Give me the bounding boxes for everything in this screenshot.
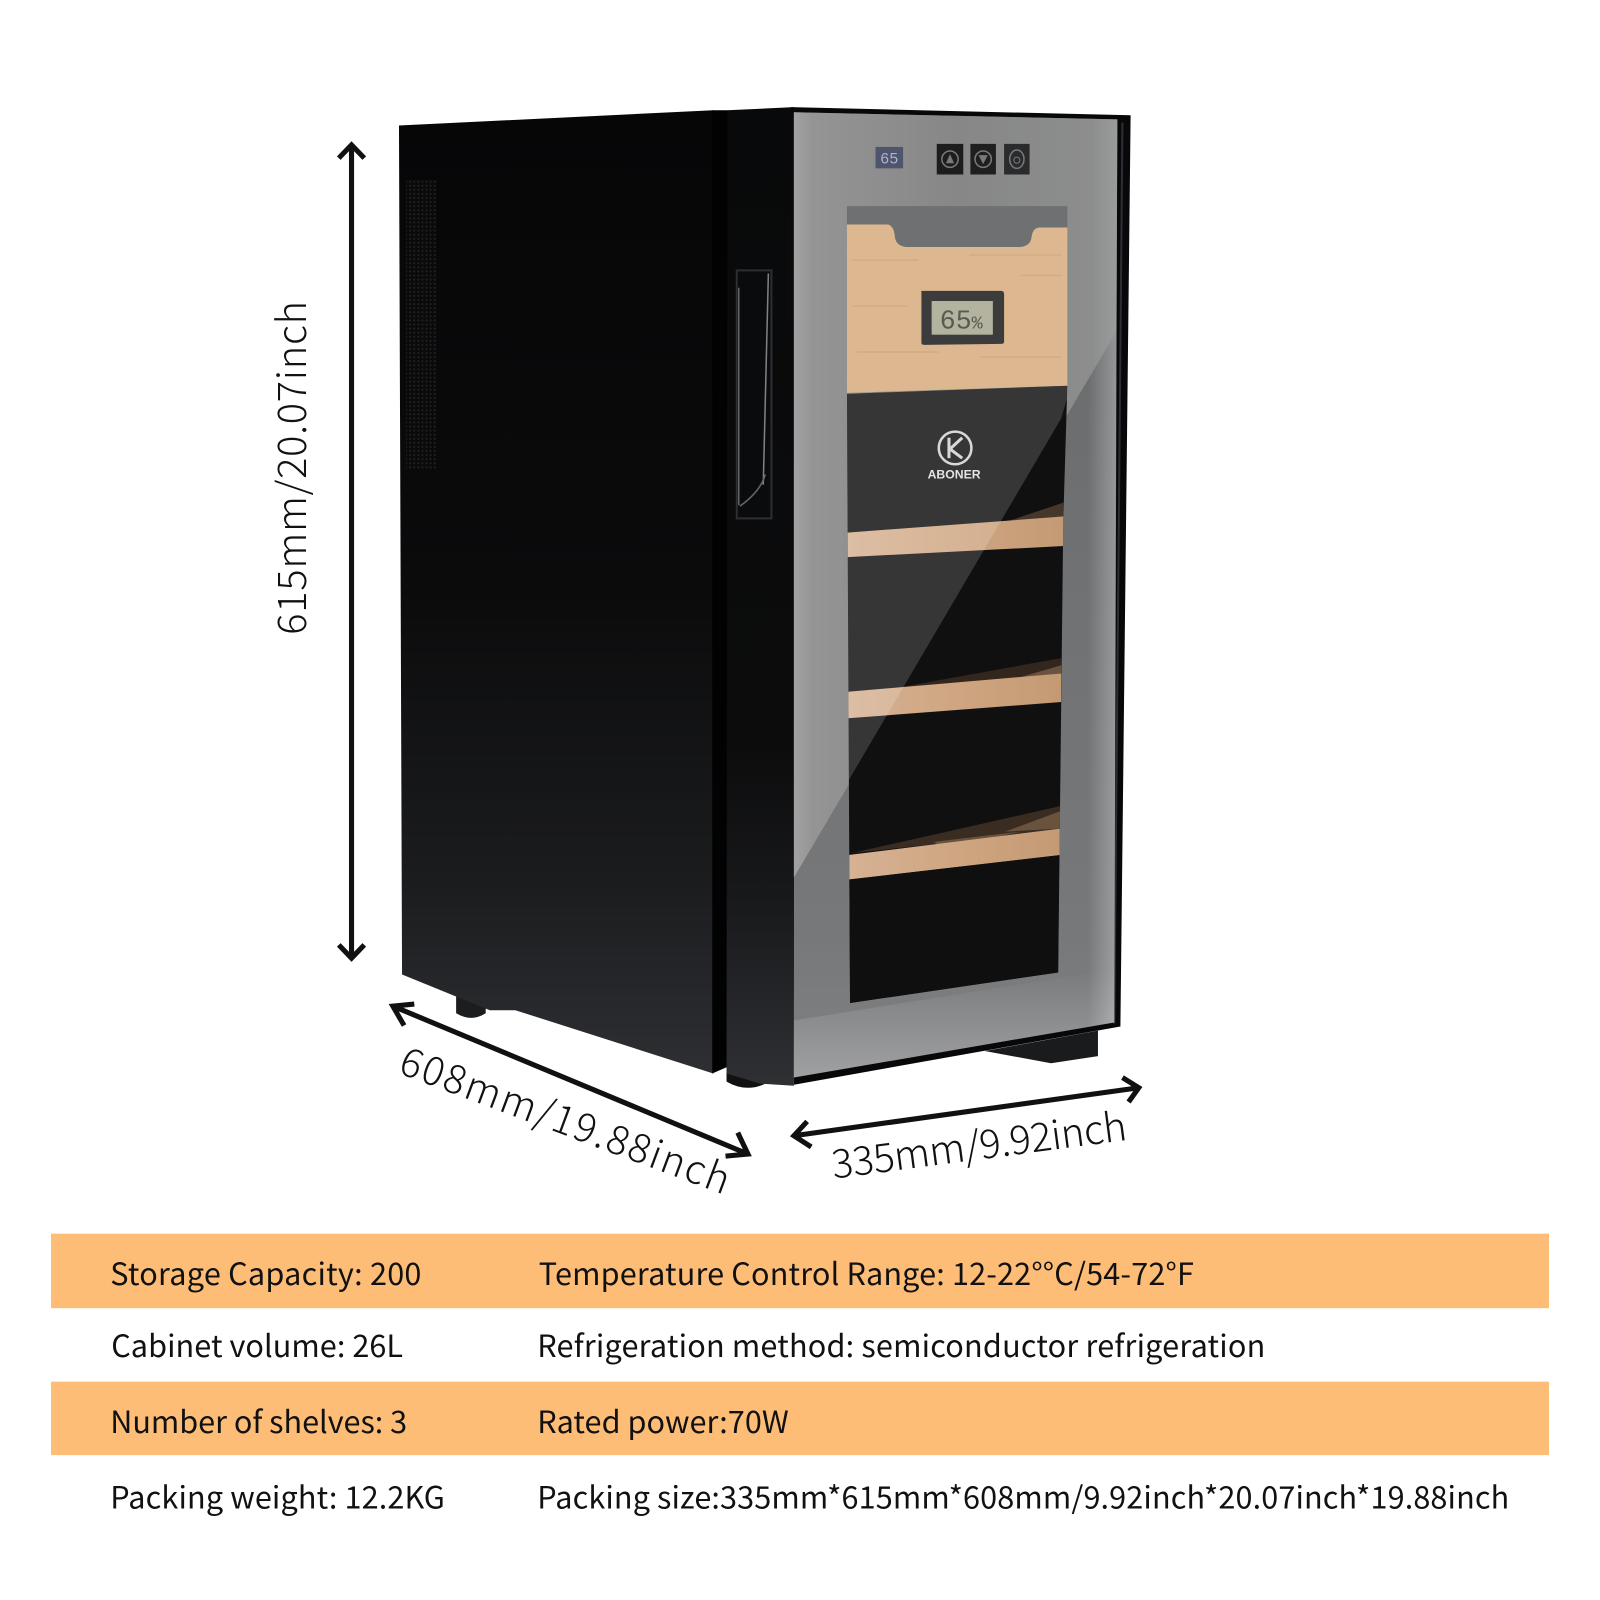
handle right highlight xyxy=(763,273,768,485)
shelf 2 streak xyxy=(1022,665,1062,677)
cabinet side panel xyxy=(399,110,713,1073)
wood grain xyxy=(852,255,1061,357)
door gap xyxy=(712,110,729,1073)
refrigeration method: Refrigeration method: semiconductor refrigeration xyxy=(537,1321,1265,1366)
bottom compartment xyxy=(849,855,1059,1003)
cabinet product illustration xyxy=(399,107,1131,1088)
right front foot block xyxy=(985,1031,1098,1063)
side vent xyxy=(406,180,437,470)
right frame inner line xyxy=(1114,122,1122,1023)
glass wash polygon xyxy=(845,384,1071,787)
left front foot xyxy=(727,1071,765,1088)
shelf 2 xyxy=(847,673,1061,718)
top recess and handle notch xyxy=(847,206,1067,248)
hygrometer: 65% xyxy=(940,307,984,337)
door handle xyxy=(737,270,771,518)
number of shelves: Number of shelves: 3 xyxy=(110,1397,407,1442)
door outer black frame xyxy=(791,107,1131,1085)
temperature display: 65 xyxy=(880,150,898,168)
handle left highlight xyxy=(738,288,740,505)
packing weight: Packing weight: 12.2KG xyxy=(110,1473,445,1518)
shelf 3 streaks xyxy=(934,812,1060,844)
glass bottom edge glow xyxy=(794,969,1114,1078)
shelf 1 xyxy=(847,516,1065,557)
temperature range: Temperature Control Range: 12-22°°C/54-72°F xyxy=(539,1249,1194,1294)
door glass darker lower tone xyxy=(794,112,1117,1078)
row band 3 xyxy=(51,1382,1549,1455)
control panel xyxy=(876,144,1030,174)
light button xyxy=(1004,144,1030,174)
row band 1 xyxy=(51,1234,1549,1308)
rated power: Rated power:70W xyxy=(537,1397,789,1442)
depth label: 608mm/19.88inch xyxy=(393,1030,740,1206)
specifications table xyxy=(51,1234,1549,1518)
depth dimension xyxy=(393,1004,748,1206)
rear foot xyxy=(456,995,486,1018)
down button xyxy=(970,144,996,174)
depth arrow xyxy=(393,1004,748,1156)
glass right edge glow xyxy=(1088,332,1116,1027)
up button xyxy=(937,144,963,174)
shelf 1 top surface xyxy=(1010,502,1064,520)
width dimension xyxy=(794,1078,1139,1190)
door side strip xyxy=(727,107,794,1086)
storage capacity: Storage Capacity: 200 xyxy=(110,1249,421,1294)
cabinet volume: Cabinet volume: 26L xyxy=(111,1321,403,1366)
handle lower curve xyxy=(740,474,765,506)
logo xyxy=(928,432,981,482)
dark interior backing xyxy=(845,384,1071,1006)
handle frame xyxy=(737,270,771,518)
humidifier wood panel xyxy=(847,224,1067,393)
height label: 615mm/20.07inch xyxy=(261,301,318,635)
shelf 3 top surface xyxy=(852,806,1060,853)
window interior sections xyxy=(845,384,1071,1006)
cabinet window xyxy=(845,206,1071,1006)
packing size: Packing size:335mm*615mm*608mm/9.92inch*20.07inch*19.88inch xyxy=(537,1473,1509,1518)
temperature display xyxy=(876,147,903,168)
door glass upper light reflection xyxy=(794,112,1117,878)
shelf 2 top surface xyxy=(898,658,1062,688)
width label: 335mm/9.92inch xyxy=(828,1095,1130,1190)
height arrow xyxy=(339,145,364,958)
logo: ABONER xyxy=(928,468,981,482)
hygrometer xyxy=(921,291,1004,345)
height dimension xyxy=(261,145,364,958)
width arrow xyxy=(794,1078,1139,1147)
shelf 3 xyxy=(848,829,1060,880)
